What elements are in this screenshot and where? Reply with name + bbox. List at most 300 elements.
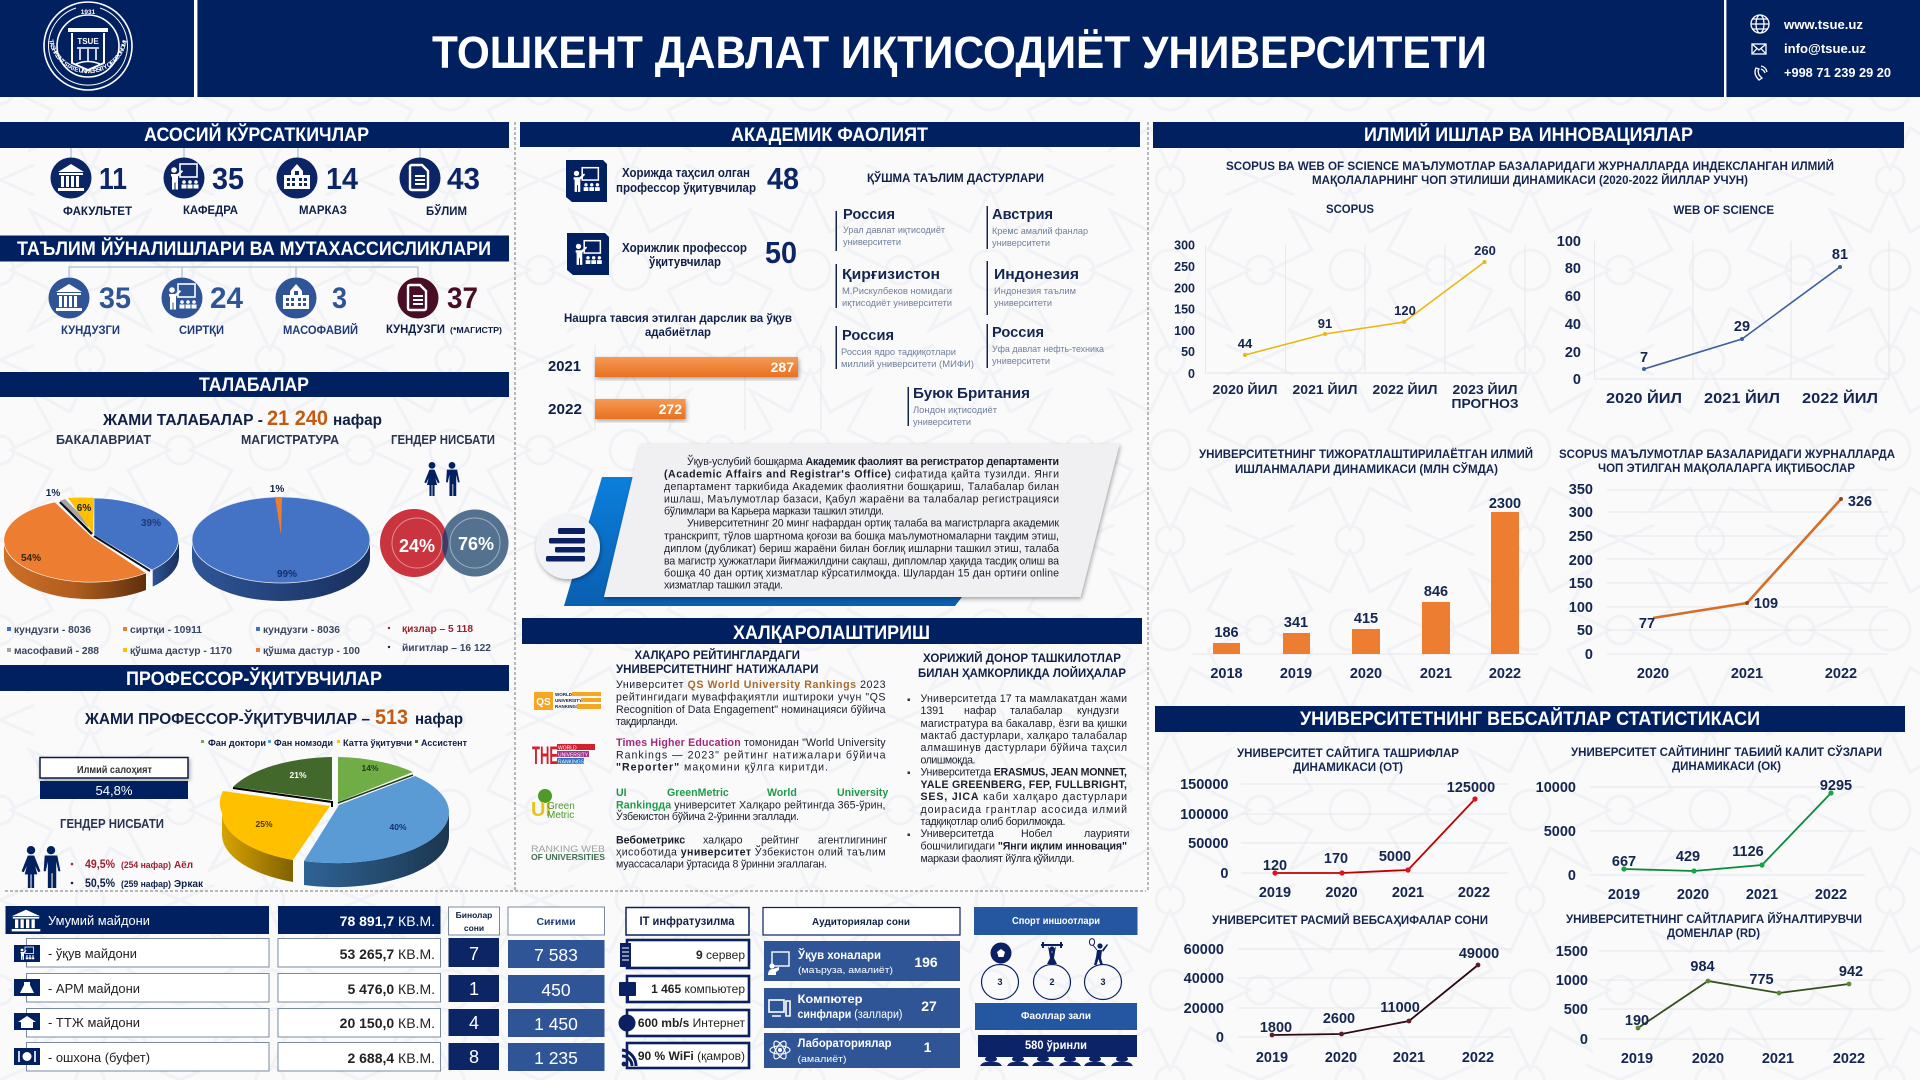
card: classrooms: Ўқув хоналари <box>797 949 881 962</box>
rankings text: рейтинг <box>761 834 799 846</box>
pie chart: bachelor: 6% <box>77 503 91 514</box>
programme: Russia Ufa: Уфа давлат нефть-техника <box>992 344 1105 355</box>
line chart: citations: 100 <box>1569 600 1593 616</box>
line chart: Web of Science: 7 <box>1640 350 1648 366</box>
programme: Kyrgyzstan: Қирғизистон <box>842 266 940 283</box>
donors text: Университетда <box>920 828 994 840</box>
line chart: citations: 2020 <box>1637 666 1669 682</box>
panel: auditoriums <box>763 908 960 1068</box>
callout: department description <box>536 444 1120 606</box>
line chart: referring domains: УНИВЕРСИТЕТНИНГ САЙТЛАРИГА ЙЎНАЛТИРУВЧИ <box>1566 911 1862 926</box>
item: servers <box>620 940 749 968</box>
stat: professors trained abroad <box>566 160 799 202</box>
bar chart: commercialised research: УНИВЕРСИТЕТНИНГ ТИЖОРАТЛАШТИРИЛАЁТГАН ИЛМИЙ <box>1199 446 1533 461</box>
rankings text: University <box>837 787 888 799</box>
line chart: Web of Science: 20 <box>1565 345 1581 361</box>
card: laboratories: 1 <box>924 1039 932 1055</box>
rankings text: Университет QS World University Rankings 2023 <box>616 679 886 691</box>
line chart: organic keywords: 5000 <box>1544 824 1576 840</box>
line chart: Web of Science: 80 <box>1565 261 1581 277</box>
line chart: web pages: 20000 <box>1184 1001 1224 1017</box>
rankings text: Rankings — 2023" рейтинг натижалари бўйича <box>616 750 886 762</box>
staff gender values: 50,5% <box>85 878 115 890</box>
indicator: distance: МАСОФАВИЙ <box>283 324 358 337</box>
line chart: web pages: 49000 <box>1459 946 1499 962</box>
heading: ТАЪЛИМ ЙЎНАЛИШЛАРИ ВА МУТАХАССИСЛИКЛАРИ <box>17 238 491 260</box>
line chart: Scopus: 2021 ЙИЛ <box>1292 382 1358 397</box>
programme: Austria: Кремс амалий фанлар <box>992 226 1088 237</box>
indicator: departments: КАФЕДРА <box>183 205 238 217</box>
heading: УНИВЕРСИТЕТНИНГ ВЕБСАЙТЛАР СТАТИСТИКАСИ <box>1300 708 1760 730</box>
staff gender values: Эркак <box>174 878 204 890</box>
donors text: мактаб дастурлари, халқаро талабалар <box>920 730 1127 742</box>
indicator: sections: БЎЛИМ <box>426 205 467 218</box>
panel: internationalisation <box>522 618 1142 870</box>
total students: 21 240 <box>267 407 328 430</box>
line chart: organic keywords <box>1536 744 1882 903</box>
line chart: referring domains: 2020 <box>1692 1051 1724 1067</box>
line chart: Scopus: 91 <box>1318 316 1332 331</box>
logo: UI GreenMetric: Green <box>547 801 575 812</box>
callout text: хизматлар ташкил этади. <box>664 580 783 592</box>
callout text <box>664 455 1059 592</box>
joint programmes heading: ҚЎШМА ТАЪЛИМ ДАСТУРЛАРИ <box>867 170 1044 185</box>
heading: АКАДЕМИК ФАОЛИЯТ <box>731 125 928 146</box>
row: study area: 7 583 <box>534 945 578 965</box>
line chart: referring domains: 942 <box>1839 964 1863 980</box>
gender ratio venn: 24% <box>399 536 435 556</box>
logo: Ranking Web: OF UNIVERSITIES <box>531 852 605 862</box>
donors text: магистратура ва бакалавр, ёзги ва қишки <box>920 718 1127 730</box>
students legend <box>7 624 491 657</box>
line chart: referring domains: 2019 <box>1621 1051 1653 1067</box>
panel: website statistics <box>1155 706 1905 1067</box>
row: total area <box>6 906 440 934</box>
line chart: citations: 200 <box>1569 553 1593 569</box>
indicator: full-time: 35 <box>99 282 131 315</box>
line chart: organic keywords: 2022 <box>1815 887 1847 903</box>
programme: Indonesia: Индонезия таълим <box>994 286 1076 297</box>
donors text: алмашинув дастурлари бўйича таҳсил <box>920 742 1127 754</box>
callout text: департамент таркибида Академик фаолиятни бошқариш, Талабалар билан <box>664 481 1059 493</box>
line chart: site visits: 2021 <box>1392 885 1424 901</box>
indicator: masters: 37 <box>447 282 478 315</box>
programme: Great Britain: университети <box>913 417 971 428</box>
pie chart: bachelor: 1% <box>46 488 60 499</box>
hall label <box>975 1003 1137 1030</box>
bar chart: commercialised research: 2022 <box>1489 666 1521 682</box>
indicator: faculties: ФАКУЛЬТЕТ <box>63 206 132 218</box>
panel: education directions <box>0 236 509 337</box>
donors text: талабалар <box>1010 705 1062 717</box>
pie chart: bachelor: 54% <box>21 553 41 564</box>
heading: ТАЛАБАЛАР <box>199 375 309 396</box>
logo: UI GreenMetric <box>531 789 575 821</box>
panel: science and innovation <box>1153 122 1904 682</box>
line chart: web pages: 0 <box>1216 1030 1224 1046</box>
stat: professors trained abroad: Хорижда таҳсил олган <box>622 166 750 180</box>
column: buildings heading <box>448 907 500 935</box>
programme: Kyrgyzstan: М.Рискулбеков номидаги <box>842 286 952 297</box>
donors text <box>908 693 1130 865</box>
programme: Great Britain: Лондон иқтисодиёт <box>913 405 998 416</box>
line chart: web pages: УНИВЕРСИТЕТ РАСМИЙ ВЕБСАҲИФАЛАР СОНИ <box>1212 912 1488 927</box>
line chart: Scopus: 2022 ЙИЛ <box>1372 382 1438 397</box>
line chart: citations: 350 <box>1569 482 1593 498</box>
donors text: олишмоқда. <box>920 754 976 766</box>
programme: Russia Ural: Урал давлат иқтисодиёт <box>843 225 946 236</box>
line chart: Web of Science: 60 <box>1565 289 1581 305</box>
line chart: Web of Science: 100 <box>1557 234 1581 250</box>
logo: THE: RANKINGS <box>558 760 585 766</box>
donors heading <box>918 650 1126 680</box>
programme: Great Britain: Буюк Британия <box>913 385 1030 402</box>
programme: Indonesia <box>986 261 1079 315</box>
university logo: TSUE <box>77 37 99 46</box>
line chart: organic keywords: 429 <box>1676 849 1700 865</box>
logo: THE: UNIVERSITY <box>558 752 589 758</box>
rankings text: ҳисоботида университет Ўзбекистон олий таълим <box>616 846 886 858</box>
line chart: citations: 50 <box>1577 623 1593 639</box>
line chart: Scopus: 2023 ЙИЛ <box>1452 382 1518 397</box>
callout text: транскрипт, тўлов шартнома қоғози ва бошқа маълумотномаларни тақдим этиш, <box>664 530 1059 542</box>
row: canteen: 1 235 <box>534 1048 578 1068</box>
row: study area: 53 265,7 КВ.М. <box>340 946 435 962</box>
card: classrooms: (маъруза, амалиёт) <box>798 965 893 976</box>
subtitle <box>1226 158 1834 187</box>
line chart: Scopus: 2020 ЙИЛ <box>1212 382 1278 397</box>
line chart: Web of Science: WEB OF SCIENCE <box>1674 203 1774 217</box>
card: laboratories: Лабораториялар <box>798 1038 892 1050</box>
callout text: ва магистр ҳужжатлари йиғмажилдини сақлаш, дипломлар ҳақида тасдиқ олиш ва <box>664 556 1059 568</box>
bar chart: textbooks: 2021 <box>548 358 581 375</box>
rankings text <box>616 679 888 870</box>
line chart: web pages <box>1184 912 1511 1066</box>
panel: academic activity <box>520 122 1140 606</box>
line chart: Web of Science: 29 <box>1734 319 1750 335</box>
line chart: web pages: 11000 <box>1380 1000 1420 1016</box>
logo: THE: WORLD <box>558 746 577 752</box>
column titles: МАГИСТРАТУРА <box>241 433 339 447</box>
line chart: organic keywords: 2019 <box>1608 887 1640 903</box>
bar chart: commercialised research <box>1192 446 1538 682</box>
rankings text: Вебометрикс <box>616 834 685 846</box>
line chart: Scopus: 250 <box>1174 260 1195 274</box>
programme: Austria: университети <box>992 238 1050 249</box>
indicator: masters: КУНДУЗГИ <box>386 324 445 336</box>
indicator: sections: 43 <box>447 161 480 196</box>
panel: IT infrastructure: IT инфратузилма <box>640 916 735 928</box>
item: computers: 1 465 компьютер <box>651 982 745 996</box>
row: dormitory area: 1 450 <box>534 1014 578 1034</box>
donors text: Университетда ERASMUS, JEAN MONNET, <box>920 766 1127 778</box>
programme: Russia Ural: университети <box>843 237 901 248</box>
donors text: бошчилигидаги "Янги иқлим инновация" <box>920 840 1127 852</box>
students legend: кундузги - 8036 <box>14 625 91 636</box>
programme: Austria <box>986 206 1088 249</box>
icon: football <box>990 942 1012 964</box>
subtitle: SCOPUS ВА WEB OF SCIENCE МАЪЛУМОТЛАР БАЗАЛАРИДАГИ ЖУРНАЛЛАРДА ИНДЕКСЛАНГАН ИЛМИЙ <box>1226 158 1834 173</box>
textbooks title: Нашрга тавсия этилган дарслик ва ўқув <box>564 311 792 325</box>
line chart: organic keywords: 667 <box>1612 854 1636 870</box>
line chart: Web of Science: 2020 ЙИЛ <box>1606 389 1682 407</box>
staff gender values: 49,5% <box>85 859 115 871</box>
total staff: 513 <box>375 706 408 729</box>
line chart: Scopus: 150 <box>1174 302 1195 316</box>
line chart: Web of Science: 0 <box>1573 372 1581 388</box>
logo: THE: THE <box>532 742 558 770</box>
row: ARM area <box>14 974 604 1003</box>
column: capacity heading <box>508 907 604 935</box>
callout text: бўлимлари ва Карьера маркази ташкил этилди. <box>664 506 884 518</box>
rankings text: UI <box>616 787 627 799</box>
line chart: citations: 150 <box>1569 576 1593 592</box>
line chart: citations: SCOPUS МАЪЛУМОТЛАР БАЗАЛАРИДАГИ ЖУРНАЛЛАРДА <box>1559 447 1895 461</box>
line chart: organic keywords: 2021 <box>1746 887 1778 903</box>
rankings heading: ХАЛҚАРО РЕЙТИНГЛАРДАГИ <box>634 647 800 662</box>
line chart: site visits: 125000 <box>1447 780 1495 796</box>
row: canteen: 8 <box>469 1047 479 1067</box>
programme: Indonesia: университети <box>994 298 1052 309</box>
donors text: лаурияти <box>1084 828 1130 840</box>
donors text: YALE GREENBERG, FEP, FULLBRIGHT, <box>920 779 1127 791</box>
line chart: citations: 77 <box>1639 616 1655 632</box>
stat: foreign professors: ўқитувчилар <box>649 255 721 269</box>
indicator: part-time: СИРТҚИ <box>179 325 224 337</box>
gender ratio venn <box>380 509 508 577</box>
line chart: web pages: 2022 <box>1462 1050 1494 1066</box>
row: ARM area: - АРМ майдони <box>48 981 140 996</box>
bar chart: commercialised research: 846 <box>1424 584 1448 600</box>
badge icon <box>536 515 600 579</box>
row: canteen: 2 688,4 КВ.М. <box>347 1050 435 1066</box>
donors text: Университетда 17 та мамлакатдан жами <box>920 693 1127 705</box>
heading: ХАЛҚАРОЛАШТИРИШ <box>733 623 930 644</box>
donors text: доирасида грантлар асосида илмий <box>920 804 1127 816</box>
line chart: referring domains: 0 <box>1580 1032 1588 1048</box>
indicator: centres: МАРКАЗ <box>299 205 347 217</box>
total staff: ЖАМИ ПРОФЕССОР-ЎҚИТУВЧИЛАР – <box>84 710 370 728</box>
counters: 2 <box>1049 977 1055 987</box>
rankings text: рейтингидаги муваффақиятли иштироки учун "QS <box>616 692 886 704</box>
bar chart: textbooks: 287 <box>771 359 794 375</box>
line chart: Scopus: 260 <box>1474 243 1496 258</box>
contacts: +998 71 239 29 20 <box>1784 65 1891 80</box>
panel: campus area table <box>6 906 604 1071</box>
line chart: Web of Science: 2021 ЙИЛ <box>1704 389 1780 407</box>
pie chart: staff: 21% <box>289 770 307 780</box>
line chart: organic keywords: 0 <box>1568 868 1576 884</box>
programme: Russia Ufa: Россия <box>992 324 1044 341</box>
heading: ИЛМИЙ ИШЛАР ВА ИННОВАЦИЯЛАР <box>1364 124 1693 146</box>
total students: нафар <box>333 412 382 429</box>
donors text: нафар <box>964 705 996 717</box>
line chart: web pages: 40000 <box>1184 971 1224 987</box>
line chart: Web of Science: 40 <box>1565 317 1581 333</box>
bar chart: textbooks: 272 <box>659 401 682 417</box>
line chart: referring domains: 2022 <box>1833 1051 1865 1067</box>
line chart: site visits: 100000 <box>1180 807 1228 823</box>
staff gender values: (254 нафар) <box>121 860 171 870</box>
line chart: web pages: 2020 <box>1325 1050 1357 1066</box>
bar chart: commercialised research: 415 <box>1354 611 1378 627</box>
rankings text: Times Higher Education томонидан "World University <box>616 737 886 749</box>
line chart: citations: ЧОП ЭТИЛГАН МАҚОЛАЛАРГА ИҚТИБОСЛАР <box>1598 461 1855 475</box>
counters <box>982 964 1122 1000</box>
bar chart: commercialised research: 186 <box>1214 625 1239 641</box>
line chart: citations: 2021 <box>1731 666 1763 682</box>
rankings text: Recognition of Data Engagement" номинацияси бўйича <box>616 704 886 716</box>
bar chart: commercialised research: ИШЛАНМАЛАРИ ДИНАМИКАСИ (МЛН СЎМДА) <box>1235 461 1498 476</box>
pie chart: staff: 14% <box>361 763 379 773</box>
indicator: centres: 14 <box>326 161 359 196</box>
line chart: citations: 300 <box>1569 505 1593 521</box>
row: study area: - ўқув майдони <box>48 946 137 961</box>
row: study area: 7 <box>469 944 479 964</box>
rankings text: Rankingда университет Халқаро рейтингда 365-ўрин, <box>616 800 886 812</box>
hall capacity: 580 ўринли <box>1025 1040 1087 1052</box>
pie chart: bachelor: 39% <box>141 518 161 529</box>
bar chart: commercialised research: 2020 <box>1350 666 1382 682</box>
line chart: referring domains: 984 <box>1690 959 1715 975</box>
programme: Russia Ural <box>836 206 946 251</box>
programme: Russia MEPhI <box>836 326 974 370</box>
logo: QS: QS <box>536 697 551 708</box>
staff legend: Ассистент <box>421 738 467 749</box>
bar chart: textbooks: 2022 <box>548 401 582 418</box>
card: computer classes <box>764 988 960 1028</box>
indicator: centres <box>276 158 359 217</box>
line chart: Web of Science: 81 <box>1832 247 1848 263</box>
logo: QS: WORLD <box>555 692 573 697</box>
students legend: йигитлар – 16 122 <box>402 643 491 654</box>
row: ARM area: 450 <box>541 980 571 1000</box>
scientific potential: 54,8% <box>96 783 133 798</box>
staff legend: Катта ўқитувчи <box>343 738 412 749</box>
hall capacity <box>978 1035 1137 1066</box>
item: computers <box>619 976 749 1002</box>
donors heading: БИЛАН ҲАМКОРЛИКДА ЛОЙИҲАЛАР <box>918 665 1126 680</box>
column: buildings heading: Бинолар <box>456 910 492 920</box>
contacts <box>1751 15 1891 80</box>
indicator: full-time: КУНДУЗГИ <box>61 325 120 337</box>
programme: Russia MEPhI: Россия ядро тадқиқотлари <box>841 347 956 358</box>
indicator: part-time: 24 <box>210 282 243 315</box>
bar chart: commercialised research: 2018 <box>1210 666 1243 682</box>
line chart: referring domains: 2021 <box>1762 1051 1794 1067</box>
donors text: тадқиқотлар олиб борилмоқда. <box>920 816 1066 828</box>
counters: 3 <box>1100 977 1106 987</box>
line chart: citations: 326 <box>1848 494 1872 510</box>
bar chart: commercialised research: 341 <box>1284 615 1308 631</box>
card: classrooms <box>764 941 960 981</box>
line chart: Scopus: 120 <box>1394 303 1416 318</box>
card: computer classes: Компютер <box>798 994 862 1006</box>
row: study area <box>14 938 604 968</box>
logo: UI GreenMetric: UI <box>531 799 551 821</box>
bar chart: commercialised research: 2021 <box>1420 666 1452 682</box>
card: computer classes: 27 <box>921 998 937 1014</box>
staff gender values: Аёл <box>174 859 193 871</box>
dashed separators <box>5 122 1148 891</box>
bar chart: textbooks <box>548 345 821 430</box>
contacts: www.tsue.uz <box>1783 17 1864 32</box>
line chart: referring domains: 1500 <box>1556 944 1588 960</box>
students legend: қўшма дастур - 1170 <box>130 645 232 657</box>
line chart: web pages: 60000 <box>1184 942 1224 958</box>
rankings text: "Reporter" мақомини қўлга киритди. <box>616 762 828 774</box>
rankings text: Ўзбекистон бўйича 2-ўринни эгаллади. <box>616 810 799 823</box>
card: classrooms: 196 <box>914 954 938 970</box>
rankings heading: УНИВЕРСИТЕТНИНГ НАТИЖАЛАРИ <box>616 662 818 676</box>
item: wifi <box>622 1043 749 1068</box>
line chart: referring domains <box>1556 911 1884 1067</box>
panel: teaching staff <box>0 665 509 890</box>
donors text: 1391 <box>920 705 944 717</box>
column: capacity heading: Сиғими <box>536 916 576 928</box>
line chart: Scopus: ПРОГНОЗ <box>1452 396 1518 411</box>
column titles: БАКАЛАВРИАТ <box>56 433 151 447</box>
pie chart: staff <box>220 757 449 887</box>
line chart: site visits: 2022 <box>1458 885 1490 901</box>
logo: QS: RANKINGS <box>555 704 579 709</box>
gender title: ГЕНДЕР НИСБАТИ <box>60 817 164 831</box>
programme: Russia Ural: Россия <box>843 206 895 223</box>
row: ARM area: 1 <box>469 979 479 999</box>
donors text: кундузги <box>1077 705 1119 717</box>
line chart: site visits: 50000 <box>1188 836 1228 852</box>
card: laboratories <box>764 1033 960 1068</box>
callout text: Университетнинг 20 минг нафардан ортиқ талаба ва магистрларга академик <box>687 518 1059 530</box>
programme: Russia MEPhI: Россия <box>842 327 894 344</box>
counters: 3 <box>997 977 1003 987</box>
indicator: masters <box>386 278 502 336</box>
indicator: distance: 3 <box>332 282 347 315</box>
logo: UI GreenMetric: Metric <box>547 810 574 821</box>
indicator: faculties: 11 <box>99 161 127 196</box>
logo: QS <box>534 692 601 710</box>
staff legend <box>201 738 467 749</box>
textbooks title: адабиётлар <box>645 325 711 339</box>
staff legend: Фан номзоди <box>274 738 333 749</box>
indicator: masters: (*МАГИСТР) <box>450 325 502 335</box>
line chart: Scopus: 0 <box>1188 367 1195 381</box>
line chart: site visits: 2019 <box>1259 885 1291 901</box>
line chart: Scopus: 300 <box>1174 238 1195 252</box>
line chart: organic keywords: 2020 <box>1677 887 1709 903</box>
line chart: referring domains: 500 <box>1564 1002 1588 1018</box>
staff gender icons <box>22 846 60 888</box>
students legend: сиртқи - 10911 <box>130 625 202 636</box>
rankings text: GreenMetric <box>667 787 729 799</box>
line chart: web pages: 2021 <box>1393 1050 1425 1066</box>
item: wifi: 90 % WiFi (қамров) <box>638 1049 745 1063</box>
line chart: site visits: 5000 <box>1379 849 1411 865</box>
indicator: sections <box>400 158 480 218</box>
students legend: кундузги - 8036 <box>263 625 340 636</box>
textbooks title <box>564 311 792 339</box>
scientific potential <box>40 758 188 799</box>
item: internet: 600 mb/s Интернет <box>638 1016 745 1030</box>
bar chart: commercialised research: 2300 <box>1489 496 1521 512</box>
subtitle: МАҚОЛАЛАРНИНГ ЧОП ЭТИЛИШИ ДИНАМИКАСИ (2020-2022 ЙИЛЛАР УЧУН) <box>1312 172 1748 187</box>
programme: Russia MEPhI: миллий университети (МИФИ) <box>841 359 974 370</box>
logo: Ranking Web: RANKING WEB <box>531 844 605 854</box>
rankings text: халқаро <box>703 834 743 846</box>
icon: tennis player <box>1089 939 1108 965</box>
title: ТОШКЕНТ ДАВЛАТ ИҚТИСОДИЁТ УНИВЕРСИТЕТИ <box>432 27 1487 78</box>
panel: students <box>0 372 509 657</box>
